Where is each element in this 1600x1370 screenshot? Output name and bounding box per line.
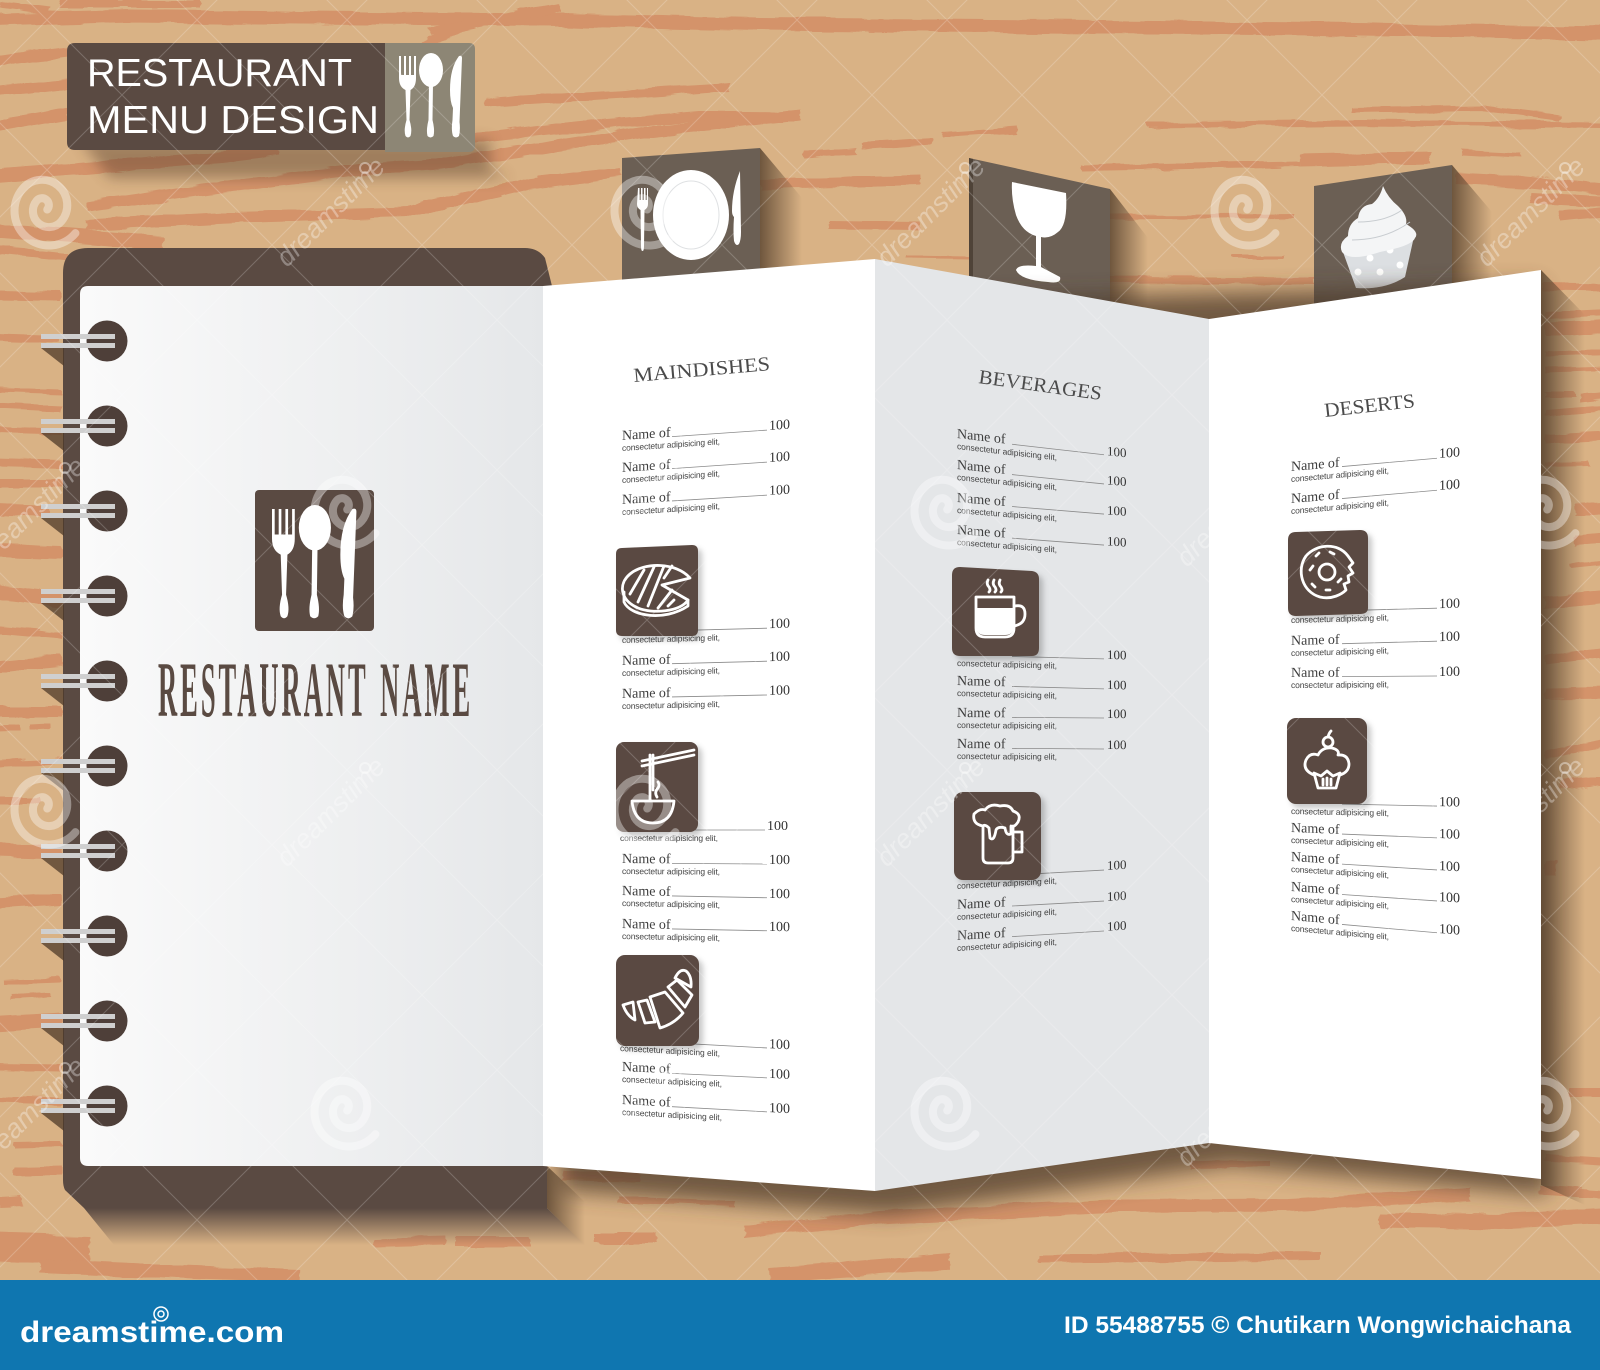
item: consectetur adipisicing elit, <box>622 1107 722 1122</box>
footer bar <box>0 1280 1600 1370</box>
item: consectetur adipisicing elit, <box>957 876 1057 891</box>
item: 100 <box>769 1067 790 1083</box>
item: 100 <box>1439 630 1460 645</box>
item: Name of <box>1291 909 1340 928</box>
icon: knife <box>732 171 741 245</box>
panel: main dishes <box>543 259 875 1191</box>
item: 100 <box>767 819 788 834</box>
item: consectetur adipisicing elit, <box>1291 645 1389 658</box>
item: consectetur adipisicing elit, <box>622 436 720 453</box>
banner shadow <box>80 140 510 178</box>
item <box>1291 792 1460 820</box>
item: Name of <box>957 737 1006 752</box>
item: Name of <box>1291 850 1340 868</box>
item: Name of <box>957 426 1006 448</box>
item: consectetur adipisicing elit, <box>1291 465 1389 484</box>
item: 100 <box>1107 533 1126 550</box>
item <box>1291 665 1460 690</box>
item: 100 <box>1107 443 1127 460</box>
item: consectetur adipisicing elit, <box>957 720 1057 731</box>
item <box>1291 597 1460 625</box>
heading: maindishes: MAINDISHES <box>633 353 771 387</box>
item <box>1291 477 1460 516</box>
item: consectetur adipisicing elit, <box>957 688 1057 701</box>
item: consectetur adipisicing elit, <box>1291 835 1389 849</box>
item: Name of <box>957 895 1006 913</box>
item <box>957 673 1126 702</box>
item <box>957 426 1127 470</box>
notebook shadow <box>84 1166 585 1245</box>
item: consectetur adipisicing elit, <box>957 537 1057 555</box>
icon: croissant <box>616 955 699 1046</box>
item: 100 <box>769 683 790 699</box>
item: Name of <box>622 884 671 900</box>
footer credit: ID 55488755 © Chutikarn Wongwichaichana <box>1064 1312 1572 1339</box>
item: consectetur adipisicing elit, <box>622 468 720 485</box>
item <box>1291 821 1460 852</box>
item <box>622 650 790 678</box>
item <box>1291 880 1460 916</box>
icon: banner cutlery <box>399 53 462 138</box>
item <box>1291 850 1460 884</box>
footer logo: dreamstime.com <box>20 1316 284 1349</box>
item: 100 <box>769 853 790 868</box>
icon: plate <box>653 170 729 260</box>
item: 100 <box>1107 677 1126 692</box>
item: Name of <box>622 1060 671 1077</box>
item: consectetur adipisicing elit, <box>622 898 720 910</box>
item: Name of <box>622 426 671 444</box>
item: 100 <box>1439 827 1460 843</box>
item: 100 <box>1439 795 1460 811</box>
item: consectetur adipisicing elit, <box>957 472 1057 492</box>
item <box>622 683 790 711</box>
tab: beverages wine glass <box>969 158 1110 325</box>
item: 100 <box>1439 477 1460 494</box>
spiral binding rings <box>41 320 128 1131</box>
watermark wordmarks: dreamstime <box>870 751 991 872</box>
item: 100 <box>769 887 790 902</box>
title banner <box>67 43 475 152</box>
item: consectetur adipisicing elit, <box>1291 497 1389 516</box>
item: 100 <box>769 450 790 466</box>
item: 100 <box>1439 445 1460 462</box>
tab: main dishes plate <box>622 148 760 285</box>
watermark wordmarks: dreamstime <box>270 751 391 872</box>
item: consectetur adipisicing elit, <box>1291 894 1389 911</box>
item <box>957 918 1126 953</box>
icon: coffee cup <box>952 567 1039 656</box>
item <box>957 857 1126 891</box>
watermark wordmarks: dreamstime <box>1470 751 1591 872</box>
item: 100 <box>769 483 790 499</box>
item <box>622 1060 790 1092</box>
item <box>622 617 790 645</box>
notebook page <box>80 286 543 1166</box>
item: consectetur adipisicing elit, <box>1291 612 1389 625</box>
tab: deserts cupcake <box>1314 165 1452 310</box>
watermark wordmarks: dreamstime <box>1470 151 1591 272</box>
icon: pie <box>616 545 698 636</box>
item <box>622 450 790 485</box>
item: Name of <box>957 674 1006 690</box>
item: Name of <box>622 852 671 867</box>
item <box>622 418 790 453</box>
item: Name of <box>1291 821 1340 838</box>
watermark wordmarks: dreamstime <box>570 1051 691 1172</box>
item: 100 <box>1107 647 1126 662</box>
item: consectetur adipisicing elit, <box>957 505 1057 523</box>
item: 100 <box>1107 737 1126 752</box>
item: Name of <box>1291 456 1340 475</box>
item: 100 <box>1439 922 1460 939</box>
item: consectetur adipisicing elit, <box>622 632 720 645</box>
title banner: MENU DESIGN <box>87 99 379 142</box>
watermark wordmarks: dreamstime <box>270 151 391 272</box>
item: Name of <box>622 653 671 669</box>
item <box>622 483 790 517</box>
item: consectetur adipisicing elit, <box>622 501 720 517</box>
item: consectetur adipisicing elit, <box>622 665 720 678</box>
item: 100 <box>769 920 790 935</box>
item: Name of <box>1291 880 1340 898</box>
item: consectetur adipisicing elit, <box>1291 679 1389 690</box>
banner icon tile <box>385 43 475 152</box>
item: 100 <box>1439 890 1460 907</box>
item: Name of <box>1291 488 1340 507</box>
item: 100 <box>1107 918 1126 934</box>
item <box>957 522 1126 560</box>
item: Name of <box>957 457 1006 478</box>
item <box>622 852 790 877</box>
icon: cover cutlery <box>272 505 356 618</box>
item: 100 <box>1107 472 1127 489</box>
item: consectetur adipisicing elit, <box>622 931 720 943</box>
item: 100 <box>769 617 790 632</box>
heading: deserts: DESERTS <box>1323 390 1416 422</box>
item <box>622 1093 790 1126</box>
icon: donut <box>1288 530 1368 616</box>
item: consectetur adipisicing elit, <box>620 1043 720 1058</box>
item: consectetur adipisicing elit, <box>622 699 720 711</box>
item: Name of <box>957 491 1006 510</box>
item: consectetur adipisicing elit, <box>957 658 1057 671</box>
item: consectetur adipisicing elit, <box>1291 864 1389 880</box>
cover logo <box>255 490 374 631</box>
icon: fork <box>637 188 648 251</box>
shadows behind tabs <box>760 148 1492 312</box>
item: Name of <box>622 686 671 702</box>
item: 100 <box>1439 665 1460 680</box>
item: 100 <box>1107 502 1127 519</box>
heading: beverages: BEVERAGES <box>977 366 1103 405</box>
item: consectetur adipisicing elit, <box>957 937 1057 953</box>
watermark wordmarks <box>0 151 1591 1172</box>
footer logo spiral <box>154 1307 168 1321</box>
item: 100 <box>1439 597 1460 612</box>
item: 100 <box>1107 857 1126 873</box>
item <box>957 643 1126 672</box>
item: 100 <box>769 1037 790 1053</box>
item: Name of <box>957 706 1006 721</box>
item <box>1291 909 1460 948</box>
item: consectetur adipisicing elit, <box>957 907 1057 922</box>
item <box>957 705 1126 731</box>
item: 100 <box>769 1101 790 1117</box>
item: consectetur adipisicing elit, <box>957 441 1057 462</box>
icon: beer mug <box>954 792 1041 880</box>
item: Name of <box>1291 666 1340 681</box>
item: 100 <box>769 418 790 434</box>
item: Name of <box>957 926 1006 944</box>
item <box>622 884 790 911</box>
item: consectetur adipisicing elit, <box>620 833 718 843</box>
item: consectetur adipisicing elit, <box>1291 923 1389 942</box>
item: Name of <box>1291 633 1340 649</box>
item <box>957 736 1126 762</box>
item: Name of <box>622 1093 671 1111</box>
panel: deserts <box>1209 270 1541 1179</box>
item: consectetur adipisicing elit, <box>622 866 720 877</box>
watermark wordmarks: dreamstime <box>870 151 991 272</box>
icon: muffin <box>1287 718 1367 804</box>
banner heading: RESTAURANT <box>87 52 352 95</box>
item: Name of <box>622 490 671 508</box>
icon: cupcake <box>1341 186 1416 288</box>
notebook cover <box>63 248 553 1208</box>
item <box>1291 630 1460 658</box>
item: Name of <box>957 523 1006 542</box>
item <box>620 1029 790 1062</box>
menu shadow <box>560 285 1548 1215</box>
item: consectetur adipisicing elit, <box>957 751 1057 762</box>
item: 100 <box>769 650 790 665</box>
watermark wordmarks: dreamstime <box>1170 451 1291 572</box>
watermark wordmarks: dreamstime <box>1170 1051 1291 1172</box>
item <box>620 819 788 843</box>
watermark spirals <box>0 169 1592 1161</box>
item <box>1291 445 1460 484</box>
item: 100 <box>1107 706 1126 721</box>
watermark wordmarks: dreamstime <box>570 451 691 572</box>
item: consectetur adipisicing elit, <box>1291 806 1389 818</box>
item <box>957 457 1127 499</box>
restaurant name: RESTAURANT NAME <box>158 646 473 733</box>
icon: noodles <box>616 742 698 832</box>
item: 100 <box>1107 888 1126 904</box>
item <box>957 888 1126 922</box>
panel: beverages <box>875 259 1209 1191</box>
item: 100 <box>1439 859 1460 875</box>
item: consectetur adipisicing elit, <box>622 1074 722 1089</box>
icon: wine glass <box>1012 182 1066 282</box>
item: Name of <box>622 917 671 933</box>
item <box>622 917 790 944</box>
item <box>957 490 1127 529</box>
item: Name of <box>622 458 671 476</box>
